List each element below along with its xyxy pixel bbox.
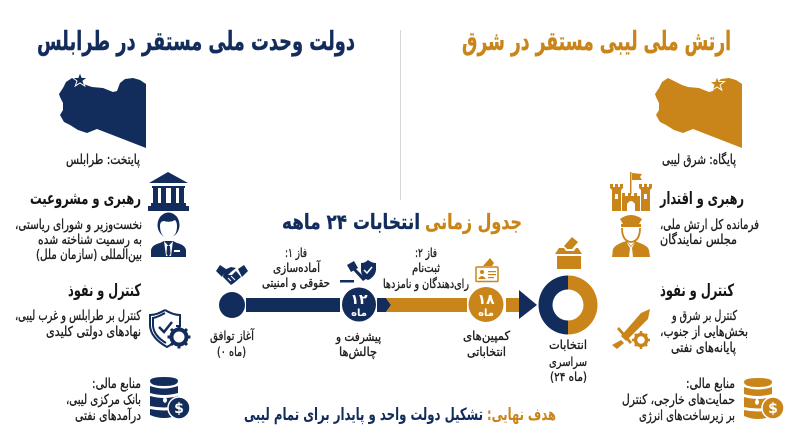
- phase 2 label: [383, 245, 469, 292]
- text: financial sources: درآمدهای نفتی: [75, 407, 141, 424]
- milestone: month 18: ۱۸: [477, 292, 495, 308]
- milestone: month 18: [468, 287, 504, 322]
- label: progress and challenges: پیشرفت و: [335, 329, 381, 345]
- panel: right, Libyan National Army: [462, 27, 784, 424]
- label: progress and challenges: چالش‌ها: [339, 344, 377, 360]
- label: nationwide elections: (ماه ۲۴): [550, 369, 587, 384]
- timeline bar: month 12 to phase 2: [377, 298, 391, 312]
- icon: ballot box: [555, 237, 582, 269]
- final goal: هدف نهایی:: [487, 405, 556, 425]
- milestone: month 12: ۱۲: [350, 292, 368, 308]
- icon: oil barrel with dollar: [150, 377, 190, 419]
- capital label: پایتخت: طرابلس: [66, 152, 140, 168]
- label: progress and challenges: [335, 329, 381, 360]
- text: control details: [15, 308, 141, 340]
- milestone: month 12: [342, 288, 376, 322]
- phase 2 label: ثبت‌نام: [412, 260, 440, 275]
- icon: Libya map navy with star: [59, 72, 146, 148]
- donut: election: [538, 276, 598, 334]
- label: nationwide elections: سراسری: [549, 354, 587, 370]
- timeline title: [282, 210, 522, 234]
- icon: oil barrel with dollar: $: [174, 401, 184, 417]
- text: control details: کنترل بر طرابلس و غرب لیبی،: [15, 308, 141, 324]
- text: leadership details: بین‌المللی (سازمان ملل): [36, 247, 142, 263]
- label: agreement start: (ماه ۰): [217, 344, 246, 359]
- heading: leadership and authority: رهبری و اقتدار: [659, 189, 744, 209]
- text: financial sources: منابع مالی:: [92, 376, 141, 392]
- icon: government building: [148, 172, 189, 211]
- text: financial sources: منابع مالی:: [686, 376, 735, 392]
- final goal: تشکیل دولت واحد و پایدار برای تمام لیبی: [244, 405, 483, 425]
- text: leadership details: [15, 217, 142, 263]
- heading: control and influence: کنترل و نفوذ: [660, 281, 734, 301]
- base label: پایگاه: شرق لیبی: [662, 151, 736, 168]
- text: authority details: [660, 217, 759, 248]
- icon: shield with check and gear: [150, 310, 190, 348]
- label: election campaigns: کمپین‌های: [463, 328, 510, 344]
- icon: oil barrel with dollar, gold: [744, 378, 784, 419]
- icon: Libya map gold with star: [655, 76, 742, 148]
- text: control details: [660, 308, 748, 356]
- label: nationwide elections: [549, 337, 587, 384]
- icon: military officer: [612, 215, 650, 257]
- text: financial sources: بانک مرکزی لیبی،: [66, 392, 141, 408]
- text: financial sources: بر زیرساخت‌های انرژی: [639, 408, 735, 424]
- text: control details: نهادهای دولتی کلیدی: [46, 324, 141, 340]
- arrow to election: [519, 290, 537, 319]
- timeline title: جدول زمانی: [425, 210, 522, 234]
- text: authority details: مجلس نمایندگان: [660, 231, 737, 248]
- phase 1 label: آماده‌سازی: [273, 260, 320, 276]
- label: agreement start: [210, 328, 254, 359]
- heading: control and influence: کنترل و نفوذ: [68, 281, 141, 301]
- phase 1 label: [262, 245, 330, 291]
- left heading: دولت وحدت ملی مستقر در طرابلس: [37, 27, 355, 57]
- label: nationwide elections: انتخابات: [549, 337, 587, 352]
- text: financial sources: حمایت‌های خارجی، کنترل: [622, 392, 735, 408]
- panel: 24-month timeline: [210, 210, 598, 384]
- phase 2 label: فاز ۲:: [415, 245, 437, 261]
- text: control details: بخش‌هایی از جنوب،: [660, 324, 748, 340]
- phase 2 label: رای‌دهندگان و نامزدها: [383, 276, 469, 292]
- text: leadership details: به رسمیت شناخته شده: [38, 232, 142, 248]
- label: election campaigns: [463, 328, 510, 359]
- text: control details: پایانه‌های نفتی: [671, 340, 736, 356]
- label: election campaigns: انتخاباتی: [467, 344, 506, 359]
- milestone: start: [219, 292, 245, 318]
- icon: castle with flag: [610, 172, 652, 211]
- text: leadership details: نخست‌وزیر و شورای ریاستی،: [15, 217, 142, 233]
- icon: gavel and shield: [340, 260, 376, 282]
- panel: left, Government of National Unity: [15, 27, 355, 424]
- heading: leadership and legitimacy: رهبری و مشروعیت: [30, 189, 141, 209]
- text: control details: کنترل بر شرق و: [671, 308, 737, 324]
- icon: sword and gear: [612, 309, 650, 349]
- icon: man in suit: [151, 212, 186, 257]
- milestone: month 18: ماه: [478, 308, 494, 319]
- icon: oil barrel with dollar, gold: $: [768, 401, 778, 417]
- icon: voter ID card: [476, 258, 498, 282]
- label: agreement start: آغاز توافق: [210, 328, 254, 344]
- text: financial sources: [66, 376, 141, 424]
- text: financial sources: [622, 376, 735, 424]
- timeline bar: phase 2: [386, 298, 467, 312]
- timeline bar: start to month 12: [246, 298, 340, 312]
- timeline bar: month 18 to election: [506, 298, 521, 312]
- text: authority details: فرمانده کل ارتش ملی،: [660, 217, 759, 233]
- milestone: month 12: ماه: [351, 308, 367, 319]
- icon: handshake: [216, 265, 248, 285]
- phase 1 label: فاز ۱:: [285, 245, 307, 261]
- phase 1 label: حقوقی و امنیتی: [262, 275, 330, 291]
- timeline title: انتخابات ۲۴ ماهه: [282, 210, 420, 234]
